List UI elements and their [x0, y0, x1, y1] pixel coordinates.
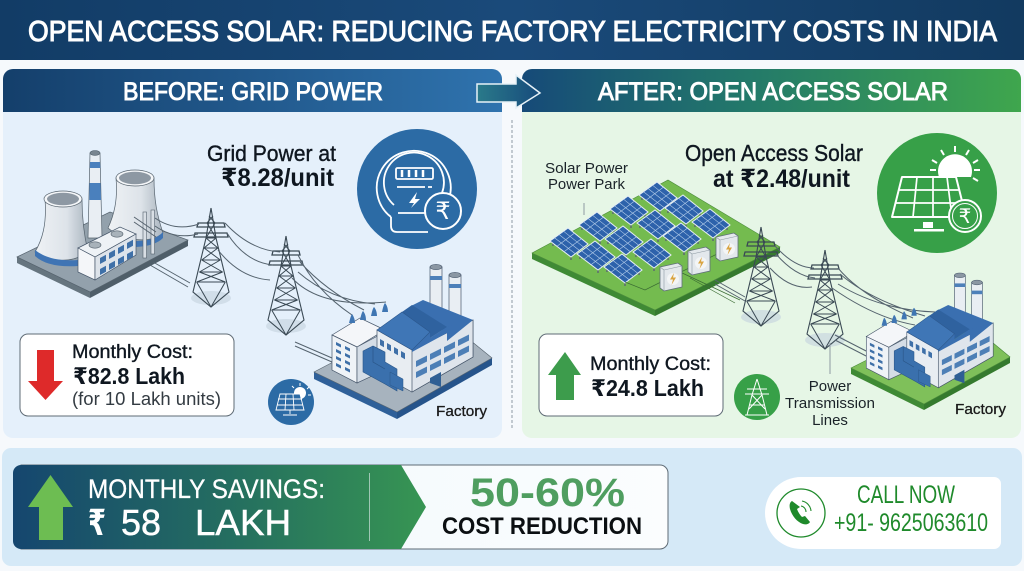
grid power rate: Grid Power at: [207, 141, 336, 166]
icon: small solar panel: [268, 379, 314, 425]
callout: monthly cost before: (for 10 Lakh units): [72, 389, 221, 409]
savings banner: COST REDUCTION: [442, 513, 642, 540]
illustration: transmission towers: [715, 227, 935, 358]
label: power transmission lines: Lines: [812, 412, 848, 429]
solar rate: Open Access Solar: [685, 140, 863, 166]
callout: monthly cost before: [20, 334, 234, 416]
after header: AFTER: OPEN ACCESS SOLAR: [598, 78, 948, 106]
panel: savings footer: [2, 448, 1022, 566]
title bar: [0, 0, 1024, 60]
panel: after open access solar: [522, 69, 1021, 438]
savings banner: MONTHLY SAVINGS:: [88, 474, 325, 504]
call now pill: CALL NOW: [857, 481, 955, 509]
label: solar power park: [545, 160, 628, 215]
label: solar power park: Solar Power: [545, 160, 628, 177]
label: power transmission lines: Power: [809, 378, 851, 395]
illustration: factory: [314, 264, 492, 419]
label: factory: Factory: [955, 401, 1007, 418]
label: power transmission lines: [785, 343, 875, 429]
label: power transmission lines: Transmission: [785, 395, 875, 412]
call now pill: [765, 477, 1001, 549]
savings banner: 58: [121, 502, 161, 543]
panel: before grid power: [3, 69, 502, 438]
illustration: power plant: [17, 151, 188, 298]
icon: solar panel with rupee: [877, 133, 997, 253]
icon: small transmission tower: [734, 374, 780, 420]
before header: BEFORE: GRID POWER: [123, 78, 383, 106]
label: factory: Factory: [436, 403, 488, 420]
solar rate: at ₹2.48/unit: [713, 165, 851, 193]
icon: savings up arrow: [28, 475, 73, 540]
savings banner: LAKH: [195, 502, 291, 543]
grid power rate: ₹8.28/unit: [221, 164, 335, 192]
callout: monthly cost after: [539, 334, 723, 416]
arrow: before to after: [477, 75, 540, 108]
callout: monthly cost after: Monthly Cost:: [590, 354, 711, 375]
divider: [511, 120, 513, 430]
icon: electricity meter: [357, 129, 477, 249]
savings banner: [13, 465, 668, 549]
savings banner: ₹: [88, 502, 106, 543]
solar rate: [685, 140, 863, 193]
callout: monthly cost before: Monthly Cost:: [72, 342, 193, 363]
callout: monthly cost before: ₹82.8 Lakh: [73, 363, 185, 389]
icon: phone: [777, 489, 825, 537]
illustration: factory: [851, 273, 1010, 410]
label: solar power park: Power Park: [548, 176, 625, 193]
grid power rate: [207, 141, 336, 192]
after header: [522, 69, 1021, 112]
icon: electricity meter: ₹: [435, 198, 451, 225]
before header: [3, 69, 502, 112]
savings banner: 50-60%: [470, 471, 625, 515]
callout: monthly cost after: ₹24.8 Lakh: [591, 375, 704, 401]
illustration: solar park: [532, 180, 780, 316]
icon: red down arrow: [28, 350, 63, 400]
icon: solar panel with rupee: ₹: [959, 206, 971, 228]
icon: green up arrow: [548, 352, 581, 400]
illustration: transmission towers: [150, 208, 386, 362]
